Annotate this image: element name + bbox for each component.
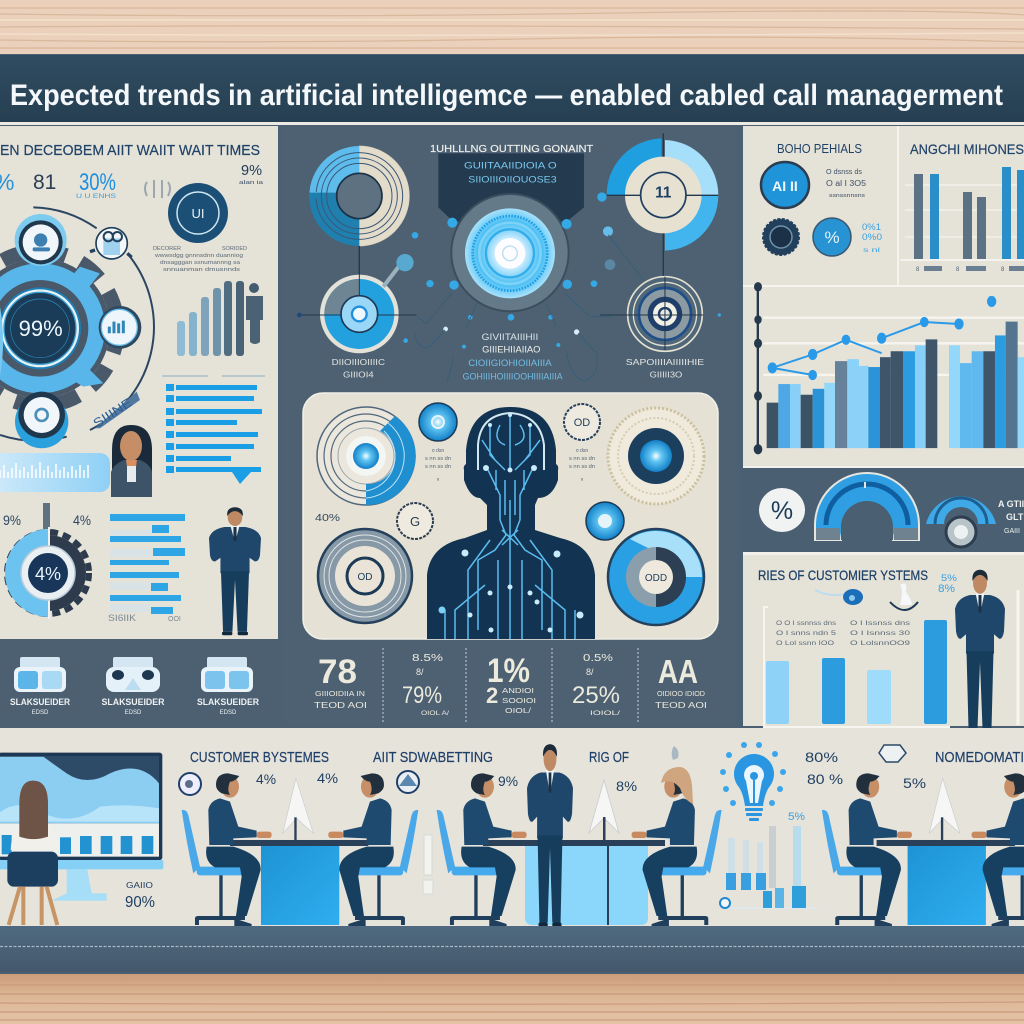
center captions: GIVIITAIIIHII (482, 332, 538, 342)
stats: small: 4% (256, 771, 276, 787)
seated person right (972, 773, 1024, 927)
trend lines (772, 322, 959, 375)
group: table one (182, 773, 418, 927)
bar chart: 8 (1001, 267, 1005, 273)
text: GLT (1006, 512, 1024, 522)
chart: dotted ring right (608, 408, 704, 504)
gear diagram: 99% (19, 316, 63, 341)
list: horizontal bars (162, 376, 265, 484)
figure: standing man (527, 744, 573, 927)
card small text (425, 448, 595, 481)
icon labels (10, 697, 259, 716)
center stats row: 25% (572, 682, 620, 709)
stat: 0%0 (862, 232, 882, 242)
stat row: 9% (241, 162, 262, 179)
node: bottom (15, 392, 68, 448)
text block (153, 246, 247, 273)
text block: ssnssnnsns (829, 193, 866, 199)
dark callout (438, 153, 584, 222)
text (998, 499, 1024, 535)
connector lines (415, 235, 643, 383)
center stats row: OIDIOO IDIOD (657, 691, 705, 698)
center captions (463, 332, 563, 381)
panel: right top small (743, 126, 898, 286)
heading: RIES OF CUSTOMIER YSTEMS (758, 567, 928, 583)
center stats row: 8/ (586, 667, 594, 677)
figure: woman (111, 425, 152, 497)
center stats row (314, 648, 707, 722)
stats: lower left: 9% (3, 512, 21, 528)
list: lower bars: SI6IIK (108, 613, 136, 623)
icon: navy dial (168, 183, 228, 243)
callout text: GUIITAAIIDIOIA O (464, 160, 557, 170)
icon labels: EDSD (220, 710, 237, 716)
card small text: s nn ss dn (425, 464, 451, 470)
text block: O al I 3O5 (826, 179, 867, 188)
icon: ring top right (564, 404, 600, 440)
axis (754, 282, 762, 454)
card small text: g (437, 476, 439, 481)
bars (767, 322, 1024, 448)
icon: blue dial small (586, 502, 624, 540)
stat: 90%: 90% (125, 894, 155, 911)
center stats row: SOOIOI (502, 698, 536, 705)
figure: man (955, 570, 1005, 733)
text block: wwwsdgg gnnnsdnn duanniog (155, 253, 243, 259)
text block: O I snns ndn 5 (776, 631, 837, 637)
node: top (15, 214, 67, 266)
heading: software: AIIT SDWABETTING (373, 749, 493, 766)
center captions: GOHIIIHOIIIIOOHIIIIAIIIA (463, 371, 563, 381)
icon: blue dial top (419, 403, 457, 441)
center stats row: 8/ (416, 667, 424, 677)
icon: landscape badge (397, 771, 419, 793)
stat row: 81 (33, 171, 56, 194)
figure: man (209, 507, 261, 635)
panel: AI silhouette card (303, 393, 718, 639)
bar chart: 8 (956, 267, 960, 273)
stat row: 30% (79, 169, 116, 196)
icon: target (179, 773, 201, 795)
icon: ring left small (397, 503, 433, 539)
text block: O Lol ssnn IOO (776, 641, 834, 647)
callout text (464, 160, 557, 185)
panel: right top bars (897, 126, 1024, 286)
panel: center (282, 126, 738, 726)
bar chart: rising bars with person (177, 281, 263, 356)
desk (483, 780, 665, 925)
center stats row: GIIIOIDIIA IN (315, 691, 365, 698)
bottom band (0, 926, 1024, 972)
stats: small (256, 749, 926, 794)
icon labels: SLAKSUEIDER (102, 697, 165, 707)
title band (0, 55, 1024, 125)
icon: navy dial: UI (192, 206, 204, 221)
donut: top right: 11 (655, 184, 672, 201)
center stats row: 0.5% (583, 653, 613, 664)
left gauge caption: DIIOIIIOIIIIC (332, 357, 385, 367)
monitor with viewer (0, 753, 163, 925)
center stats row: 8.5% (412, 653, 443, 664)
card small text: o dsn (576, 448, 588, 454)
icon labels: EDSD (125, 710, 142, 716)
center stats row: 1% (487, 652, 530, 690)
seated person left (822, 773, 912, 927)
donut: top left (309, 146, 409, 277)
stat: 90% (125, 881, 155, 911)
donut: bottom left (297, 246, 417, 353)
center stats row: 2 (486, 683, 498, 708)
badge: percent (759, 488, 805, 532)
text block: O dsnss ds (826, 169, 863, 176)
icon: headset (106, 657, 160, 692)
icon: blue eye (815, 589, 863, 605)
card small text: o dsn (432, 448, 444, 454)
stats: small: 80 % (807, 771, 843, 787)
center stats row: AA (658, 653, 698, 690)
stats: small: 8% (616, 778, 637, 794)
callout heading: 1UHLLLNG OUTTING GONAINT (430, 144, 593, 155)
center stats row: OIOL/ (505, 708, 531, 715)
panel: icon row (0, 642, 278, 726)
text block: O I Issnss dns (850, 621, 910, 627)
icon: percentage gear (5, 527, 89, 619)
waveform card (0, 453, 110, 492)
group: table two (437, 773, 722, 927)
card small text: s nn ss dn (569, 456, 595, 462)
badge: percent: % (771, 497, 793, 525)
callout text: SIIOIIIOIIOUOSE3 (468, 175, 557, 185)
chart: ring lower left: OD (358, 572, 372, 583)
bar chart: 8 (916, 267, 920, 273)
stat (938, 573, 957, 595)
chart: ring left (317, 407, 416, 505)
card small text: g (581, 476, 583, 481)
stats: small: 4% (317, 770, 338, 786)
text block: O O I ssnnss dns (776, 621, 836, 627)
center stats row: 79% (402, 682, 442, 709)
gauge: arch (815, 473, 919, 540)
heading: BOHO PEHIALS (777, 141, 862, 156)
right gauge caption: SAPOIIIIAIIIIIHIE (626, 357, 704, 367)
icon: ring left small: G (410, 514, 420, 529)
right gauge caption: GIIIII3O (650, 369, 683, 379)
text block: SORIDED (222, 246, 247, 252)
gear diagram: SIIINE (91, 395, 135, 431)
list: lower bars (108, 514, 185, 623)
desk (877, 778, 1015, 925)
icon: bell (890, 584, 918, 610)
card small text: s nn ss dn (569, 464, 595, 470)
text block: O LolsnnOO9 (850, 641, 911, 647)
stat row (0, 162, 263, 200)
desk (230, 778, 368, 925)
panel: bottom scene (0, 728, 1024, 927)
icon: dark ring (763, 219, 799, 255)
chart: ring lower left (318, 529, 412, 623)
heading: rig of: RIG OF (589, 749, 629, 766)
seated person left (437, 773, 527, 927)
icon labels: SLAKSUEIDER (197, 697, 259, 707)
chart: blue donut right: ODD (645, 573, 667, 584)
text block: O I Isnnss 30 (850, 631, 911, 637)
left gauge caption: GIIIOI4 (343, 369, 374, 379)
bar chart (900, 167, 1024, 273)
icon labels: SLAKSUEIDER (10, 697, 70, 707)
stats: small: 80% (805, 749, 838, 765)
connector dots (403, 192, 721, 349)
text block (776, 621, 911, 647)
center stats row: OIOL A/ (421, 711, 449, 717)
right gauge caption (626, 357, 704, 379)
stats: small: 5% (903, 775, 926, 791)
left gauge caption (332, 357, 385, 379)
stat: s nl (863, 248, 880, 254)
node: right (99, 306, 141, 349)
center stats row: ANDIOI (502, 688, 534, 695)
text block: dnsagggan ssnumannng sa (160, 260, 240, 266)
center captions: GIIIEHIIAIIAO (482, 345, 540, 355)
icon: blue dial: AI II (772, 178, 798, 194)
panel: right main chart (743, 282, 1024, 466)
stats: small: 9% (498, 773, 518, 789)
seated person right (632, 773, 722, 927)
heading: wait times: EN DECEOBEM AIIT WAIIT WAIT TIMES (0, 142, 260, 159)
stat: 5% (941, 573, 957, 583)
icon: card 3 (201, 657, 253, 692)
center stats row: IOIOL/ (590, 711, 621, 717)
seated person left (182, 773, 272, 927)
icon: mini tower (423, 835, 433, 894)
stat: 8% (938, 583, 955, 595)
stat (862, 222, 882, 254)
small stats: bulb: 5% (788, 811, 805, 823)
icon: blue dial (761, 162, 809, 208)
card small text: s nn ss dn (425, 456, 451, 462)
stat: 0%1 (862, 222, 881, 232)
text: A GTII (998, 499, 1024, 509)
panel: wait times (left) (0, 126, 278, 639)
center captions: CIOIIGIOHIOIIAIIIA (468, 358, 552, 368)
stat row: alan ia (239, 180, 263, 186)
panel: right gauges strip (743, 466, 1024, 555)
icon: percentage gear: 4% (35, 564, 61, 584)
gear diagram (0, 207, 154, 448)
seated person right (328, 773, 418, 927)
icon: ring top right: OD (574, 417, 590, 429)
bar chart: bulb (720, 826, 817, 908)
icon: percent dial (813, 218, 851, 256)
central lens (451, 194, 569, 311)
icon labels: EDSD (32, 710, 49, 716)
label: 40%: 40% (315, 513, 340, 524)
icon: brain badge (879, 745, 906, 762)
stat: 90%: GAIIO (126, 881, 153, 890)
group: table three (822, 773, 1024, 927)
chart: blue donut right (608, 529, 704, 625)
woman hair (661, 767, 693, 804)
bar chart (764, 590, 1018, 727)
donut: top right (607, 133, 718, 277)
panel: right customer bars (743, 555, 1024, 733)
icon: light bulb (720, 742, 786, 821)
icon: card 1 (14, 657, 66, 692)
center stats row: 78 (318, 653, 357, 691)
rings: bottom right (600, 277, 703, 351)
stats: lower left (3, 503, 91, 529)
node: cup bubble (90, 228, 132, 259)
text: GAIII (1004, 528, 1020, 535)
figure: circuit head (427, 407, 595, 639)
center stats row: TEOD AOI (314, 701, 367, 710)
gauge: wifi arch (926, 496, 996, 547)
text block: snnuanman dmusnnds (163, 267, 241, 273)
heading: customer systems: CUSTOMER BYSTEMES (190, 749, 329, 766)
text block: DECORER (153, 246, 181, 252)
text block (826, 169, 867, 199)
center stats row: TEOD AOI (655, 701, 707, 710)
stats: lower left: 4% (73, 512, 91, 528)
list: lower bars: OOI (168, 616, 181, 623)
icon: top shell (672, 746, 678, 760)
stat row: U U ENHS (76, 194, 116, 200)
icon: percent dial: % (824, 228, 840, 247)
